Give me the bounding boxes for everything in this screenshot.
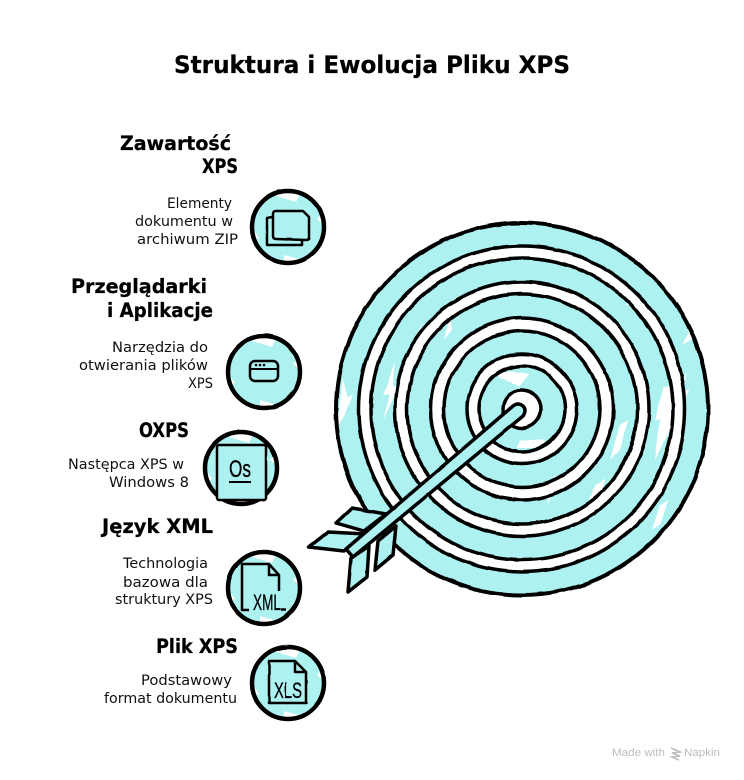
- icon: XML file: [228, 552, 300, 624]
- text: Elementy dokumentu w archiwum ZIP: [135, 196, 238, 248]
- arrow fletching: [309, 508, 396, 592]
- panel: Zawartość XPS: [120, 132, 324, 263]
- text: Narzędzia do otwierania plików XPS: [79, 340, 213, 392]
- text: Technologia bazowa dla struktury XPS: bazowa dla: [123, 575, 208, 591]
- footer: Made with Napkin: Napkin: [684, 747, 720, 759]
- panel: OXPS: [68, 419, 277, 504]
- text: Technologia bazowa dla struktury XPS: struktury XPS: [115, 592, 213, 608]
- icon: stacked documents: [252, 191, 324, 263]
- text: Następca XPS w Windows 8: Windows 8: [109, 475, 189, 491]
- footer: Made with Napkin: Made with: [612, 747, 665, 759]
- panel: Przeglądarki i Aplikacje: [71, 275, 300, 408]
- heading: Zawartość XPS: XPS: [202, 155, 238, 178]
- icon: XLS file: [252, 647, 324, 719]
- heading: Przeglądarki i Aplikacje: Przeglądarki: [71, 275, 207, 298]
- icon: Os key: Os: [229, 456, 251, 483]
- icon: XML file: XML: [253, 590, 281, 615]
- heading: OXPS: OXPS: [139, 419, 189, 442]
- arrow shaft: [346, 404, 525, 557]
- heading: Przeglądarki i Aplikacje: i Aplikacje: [107, 299, 213, 322]
- text: Technologia bazowa dla struktury XPS: Technologia: [122, 556, 208, 572]
- icon: XLS file: XLS: [274, 678, 302, 703]
- text: Elementy dokumentu w archiwum ZIP: Elementy: [167, 196, 232, 212]
- text: Narzędzia do otwierania plików XPS: XPS: [188, 376, 213, 392]
- text: Technologia bazowa dla struktury XPS: [115, 556, 213, 608]
- text: Elementy dokumentu w archiwum ZIP: archiwum ZIP: [137, 232, 238, 248]
- text: Podstawowy format dokumentu: format dokumentu: [104, 691, 237, 707]
- text: Elementy dokumentu w archiwum ZIP: dokumentu w: [135, 214, 233, 230]
- icon: Os key: [205, 432, 277, 504]
- panel: Język XML: [100, 515, 300, 624]
- text: Podstawowy format dokumentu: [104, 673, 237, 707]
- panel: Plik XPS: [104, 635, 324, 719]
- text: Następca XPS w Windows 8: [68, 457, 189, 491]
- text: Następca XPS w Windows 8: Następca XPS w: [68, 457, 184, 473]
- text: Narzędzia do otwierania plików XPS: Narzędzia do: [112, 340, 208, 356]
- heading: Język XML: Język XML: [100, 515, 213, 538]
- text: Podstawowy format dokumentu: Podstawowy: [141, 673, 232, 689]
- heading: Plik XPS: Plik XPS: [156, 635, 238, 658]
- footer: Made with Napkin: [612, 747, 720, 760]
- heading: Przeglądarki i Aplikacje: [71, 275, 213, 322]
- title: Struktura i Ewolucja Pliku XPS: [174, 51, 570, 79]
- heading: Zawartość XPS: [120, 132, 238, 178]
- text: Narzędzia do otwierania plików XPS: otwierania plików: [79, 358, 208, 374]
- icon: browser window: [228, 336, 300, 408]
- arrow: [309, 404, 525, 592]
- target with concentric rings: [336, 223, 708, 595]
- heading: Zawartość XPS: Zawartość: [120, 132, 231, 155]
